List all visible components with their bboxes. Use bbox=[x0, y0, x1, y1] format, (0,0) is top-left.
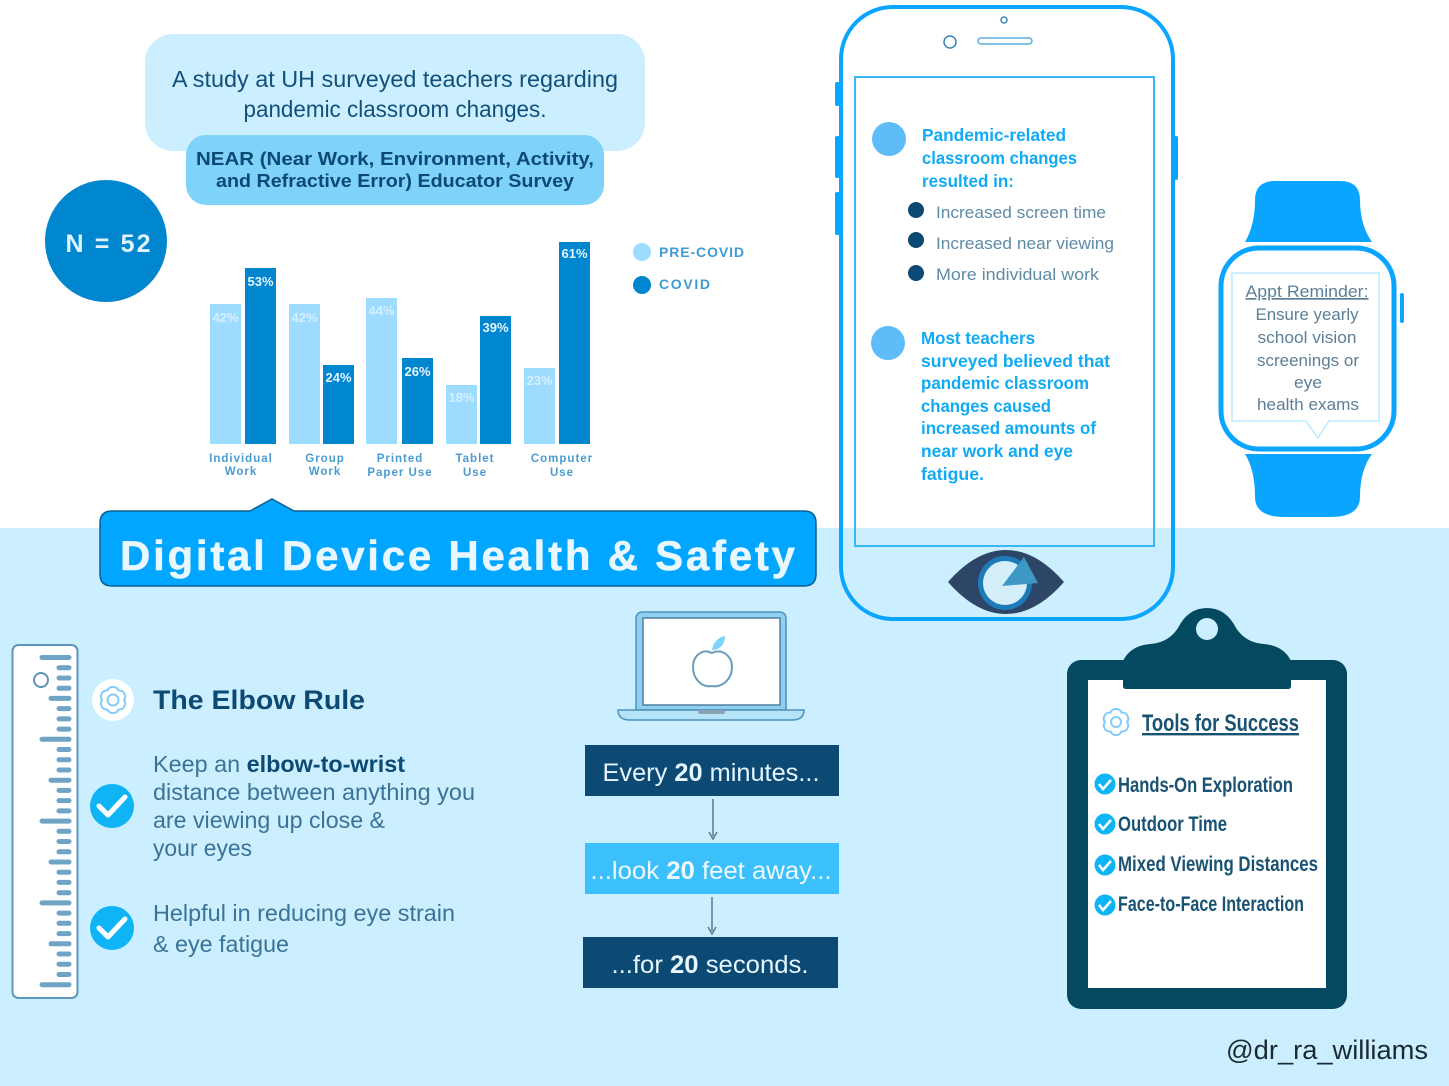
section: The Elbow Rule: The Elbow Rule bbox=[153, 685, 365, 715]
group: Computer Use: Use bbox=[550, 467, 574, 479]
tools list: Face-to-Face Interaction bbox=[1118, 893, 1304, 916]
step: look 20 feet away: ...look 20 feet away... bbox=[590, 857, 832, 885]
group: Tablet Use bbox=[446, 316, 511, 479]
watch text: health exams bbox=[1257, 395, 1359, 414]
phone bullet list: More individual work bbox=[936, 265, 1100, 284]
author handle: @dr_ra_williams bbox=[1226, 1035, 1428, 1065]
group: Printed Paper Use bbox=[366, 298, 433, 479]
intro speech bubble: pandemic classroom changes. bbox=[244, 96, 546, 122]
step: look 20 feet away bbox=[585, 843, 839, 894]
step: for 20 seconds bbox=[583, 937, 838, 988]
phone text: teacher beliefs: surveyed believed that bbox=[921, 351, 1110, 371]
eye strain text: & eye fatigue bbox=[153, 931, 289, 957]
clipboard: tools for success: Tools for Success bbox=[1142, 710, 1299, 737]
group: Printed Paper Use: 26% bbox=[404, 364, 431, 379]
eye strain text: Helpful in reducing eye strain bbox=[153, 900, 455, 926]
watch: appointment reminder bbox=[1221, 181, 1404, 517]
survey name label bbox=[186, 135, 604, 205]
phone bullet list bbox=[908, 202, 1114, 284]
icon: eye home button bbox=[948, 550, 1064, 614]
watch text bbox=[1246, 282, 1368, 414]
phone text: teacher beliefs: changes caused bbox=[921, 396, 1051, 416]
group: Computer Use bbox=[524, 242, 593, 479]
sample size circle: N = 52 bbox=[66, 230, 150, 258]
watch text: Ensure yearly bbox=[1256, 305, 1359, 324]
group: Individual Work: Individual bbox=[209, 453, 273, 465]
survey name label: and Refractive Error) Educator Survey bbox=[216, 170, 575, 191]
tools list: Mixed Viewing Distances bbox=[1118, 853, 1318, 876]
phone text: teacher beliefs bbox=[871, 326, 1115, 484]
tools list bbox=[1094, 774, 1318, 916]
group: Computer Use: 61% bbox=[562, 246, 588, 261]
group: Group Work: 42% bbox=[292, 310, 318, 325]
phone text: pandemic-related changes bbox=[872, 122, 1082, 191]
clipboard: tools for success bbox=[1067, 608, 1347, 1009]
phone text: teacher beliefs: near work and eye bbox=[921, 441, 1073, 461]
group: Individual Work: 42% bbox=[212, 310, 239, 325]
arrow bbox=[708, 897, 716, 934]
phone mockup bbox=[835, 7, 1178, 619]
group: Individual Work: Work bbox=[225, 466, 257, 478]
elbow rule text: are viewing up close & bbox=[153, 807, 385, 833]
step: for 20 seconds: ...for 20 seconds. bbox=[612, 951, 808, 979]
elbow rule text: distance between anything you bbox=[153, 779, 475, 805]
eye strain text bbox=[153, 900, 455, 957]
phone bullet list: Increased screen time bbox=[936, 203, 1106, 222]
bar chart bbox=[209, 242, 593, 479]
chart legend: PRE-COVID bbox=[659, 244, 744, 260]
group: Printed Paper Use: Printed bbox=[377, 453, 423, 465]
icon: gear bbox=[92, 679, 134, 721]
icon: laptop with apple bbox=[618, 612, 804, 720]
banner: Digital Device Health & Safety: Digital Device Health & Safety bbox=[120, 532, 798, 579]
group: Individual Work: 53% bbox=[248, 274, 274, 289]
sample size circle bbox=[45, 180, 167, 302]
survey name label: NEAR (Near Work, Environment, Activity, bbox=[196, 148, 594, 169]
chart legend: COVID bbox=[659, 276, 710, 292]
group: Tablet Use: Use bbox=[463, 467, 487, 479]
20-20-20 rule steps bbox=[583, 745, 839, 988]
phone text: pandemic-related changes: Pandemic-related bbox=[922, 125, 1066, 145]
elbow rule text: Keep an elbow-to-wrist bbox=[153, 751, 405, 777]
group: Group Work: Group bbox=[305, 453, 345, 465]
icon: check mark bbox=[90, 906, 134, 950]
phone text: teacher beliefs: pandemic classroom bbox=[921, 373, 1089, 393]
watch text: eye bbox=[1294, 373, 1322, 392]
group: Tablet Use: 39% bbox=[482, 320, 509, 335]
phone text: teacher beliefs: Most teachers bbox=[921, 328, 1035, 348]
group: Tablet Use: 18% bbox=[448, 390, 475, 405]
phone text: teacher beliefs: increased amounts of bbox=[921, 418, 1096, 438]
watch text: school vision bbox=[1258, 328, 1356, 347]
group: Computer Use: 23% bbox=[526, 373, 553, 388]
group: Printed Paper Use: Paper Use bbox=[367, 467, 433, 479]
section: The Elbow Rule bbox=[90, 679, 475, 957]
phone side buttons bbox=[835, 82, 1178, 235]
phone text: pandemic-related changes: resulted in: bbox=[922, 171, 1014, 191]
elbow rule text: your eyes bbox=[153, 835, 252, 861]
watch text: Appt Reminder: bbox=[1246, 282, 1368, 301]
step: every 20 minutes bbox=[585, 745, 839, 796]
group: Computer Use: Computer bbox=[531, 453, 593, 465]
watch text: screenings or bbox=[1257, 351, 1359, 370]
group: Tablet Use: Tablet bbox=[455, 453, 495, 465]
intro speech bubble: A study at UH surveyed teachers regarding bbox=[172, 66, 618, 92]
group: Individual Work bbox=[209, 268, 276, 478]
phone bullet list: Increased near viewing bbox=[936, 234, 1114, 253]
icon: ruler bbox=[12, 645, 78, 998]
phone text: pandemic-related changes: classroom changes bbox=[922, 148, 1077, 168]
icon: check mark bbox=[90, 784, 134, 828]
icon: gear bbox=[1104, 709, 1128, 735]
step: every 20 minutes: Every 20 minutes... bbox=[602, 759, 820, 787]
chart legend bbox=[633, 243, 744, 294]
watch straps bbox=[1245, 181, 1372, 242]
tools list: Outdoor Time bbox=[1118, 813, 1227, 836]
tools list: Hands-On Exploration bbox=[1118, 774, 1293, 797]
elbow rule text bbox=[153, 751, 475, 861]
group: Group Work: 24% bbox=[326, 370, 352, 385]
arrow bbox=[709, 799, 717, 839]
banner: Digital Device Health & Safety bbox=[100, 499, 816, 586]
intro speech bubble bbox=[145, 34, 645, 151]
phone text: teacher beliefs: fatigue. bbox=[921, 464, 984, 484]
group: Group Work: Work bbox=[309, 466, 341, 478]
group: Group Work bbox=[289, 304, 354, 478]
group: Printed Paper Use: 44% bbox=[368, 303, 395, 318]
